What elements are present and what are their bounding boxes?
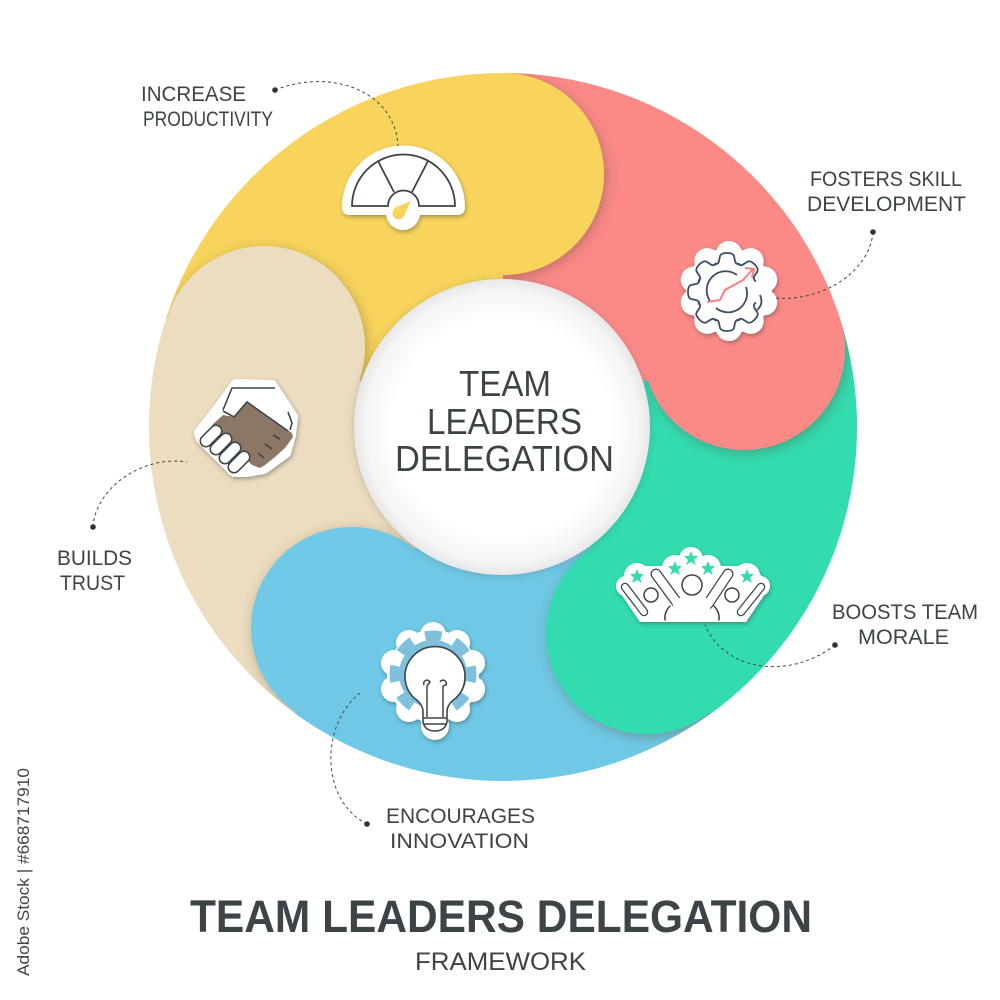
side credit: Adobe Stock | #668717910 (14, 768, 33, 976)
center title (395, 363, 614, 479)
segment: yellow head (494, 73, 612, 282)
label: increase productivity: INCREASE (141, 83, 246, 106)
leader: team morale (705, 625, 835, 667)
donut cycle diagram (149, 73, 857, 781)
label: increase productivity: PRODUCTIVITY (143, 108, 273, 131)
leader: innovation (331, 693, 367, 824)
center circle (354, 279, 650, 575)
label: boosts team morale: BOOSTS TEAM (832, 601, 978, 624)
label: boosts team morale (832, 601, 978, 649)
leader: trust (93, 461, 187, 527)
label: fosters skill development (807, 168, 966, 216)
label: increase productivity (141, 83, 273, 131)
leader: productivity (275, 82, 398, 146)
label: fosters skill development: FOSTERS SKILL (810, 168, 962, 191)
dot: team morale (832, 642, 838, 648)
subtitle: FRAMEWORK (415, 948, 586, 976)
icon: handshake (199, 384, 293, 472)
label: builds trust (57, 547, 132, 595)
segment: green (503, 318, 857, 734)
label: builds trust: TRUST (60, 572, 125, 595)
icon: gear with growth arrow (681, 241, 777, 341)
label: encourages innovation: INNOVATION (390, 830, 529, 853)
label: builds trust: BUILDS (57, 547, 132, 570)
center title: DELEGATION (395, 438, 614, 479)
label: boosts team morale: MORALE (858, 626, 949, 649)
center title: LEADERS (427, 401, 582, 442)
icon: cheering team with stars (616, 547, 770, 622)
center title: TEAM (459, 363, 551, 404)
icon: light bulb with gear (381, 622, 485, 740)
segment: yellow body (166, 73, 503, 427)
segment: beige (149, 242, 416, 714)
main title: TEAM LEADERS DELEGATION (190, 891, 812, 942)
segment: salmon (503, 73, 845, 450)
dot: trust (90, 524, 96, 530)
label: encourages innovation (386, 805, 535, 853)
dot: innovation (364, 821, 370, 827)
dot: productivity (272, 87, 278, 93)
icon: gauge (342, 146, 465, 230)
leader: skill development (775, 232, 873, 298)
label: fosters skill development: DEVELOPMENT (807, 193, 966, 216)
label: encourages innovation: ENCOURAGES (386, 805, 535, 828)
segment: blue (246, 523, 711, 781)
dot: skill development (870, 229, 876, 235)
